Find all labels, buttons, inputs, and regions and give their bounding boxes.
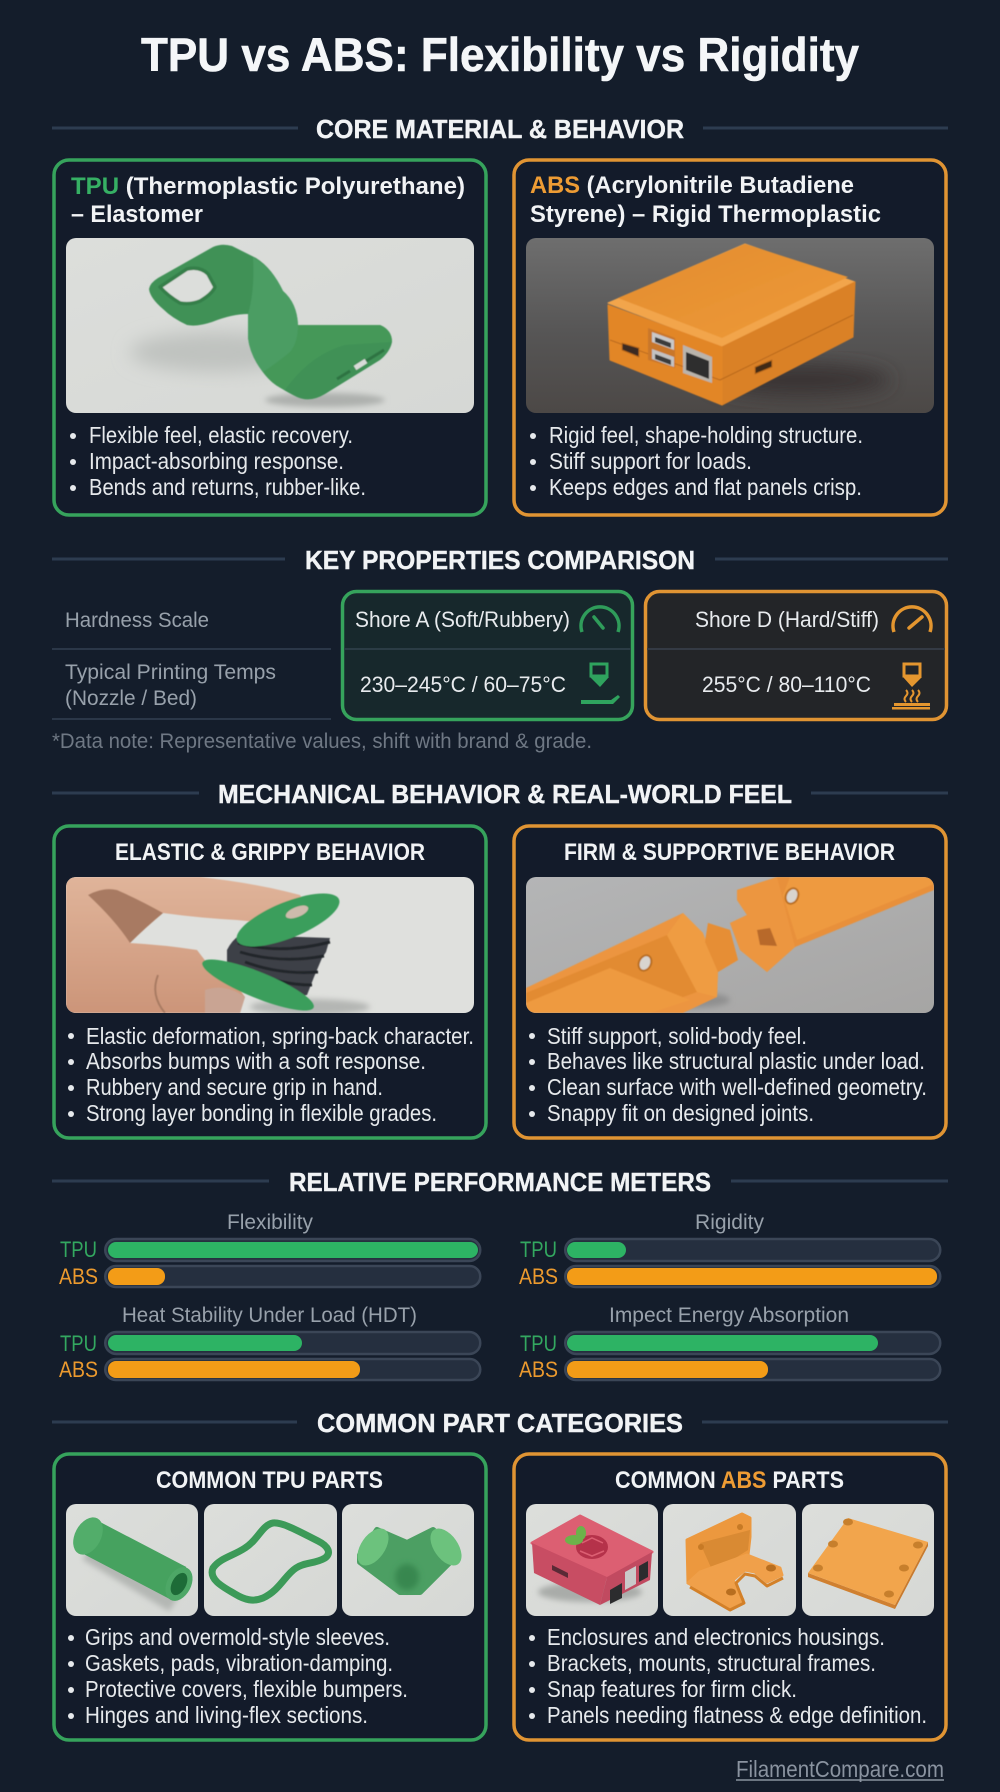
meter: heat stability under load: ABS — [59, 1357, 98, 1382]
row labels: Hardness Scale — [65, 609, 209, 632]
TPU heading — [71, 173, 465, 228]
TPU heading: TPU (Thermoplastic Polyurethane) — [71, 173, 465, 200]
meter: rigidity: ABS — [519, 1264, 558, 1289]
image: orange flat panel — [802, 1504, 934, 1616]
row labels: (Nozzle / Bed) — [65, 687, 197, 710]
image: green grip sleeve — [66, 1504, 198, 1616]
TPU behavior bullet list — [68, 1023, 474, 1126]
TPU values column — [342, 592, 632, 720]
TPU parts bullet list: Grips and overmold-style sleeves. — [85, 1624, 390, 1650]
data note: *Data note: Representative values, shift with brand & grade. — [52, 730, 592, 753]
ABS behavior bullet list: Snappy fit on designed joints. — [547, 1100, 814, 1126]
ABS heading: ABS (Acrylonitrile Butadiene — [530, 172, 854, 199]
ABS heading: Styrene) – Rigid Thermoplastic — [530, 201, 881, 228]
image: green wavy gasket — [204, 1504, 337, 1616]
TPU bullet list: Impact-absorbing response. — [89, 448, 344, 474]
ABS parts heading: COMMON ABS PARTS — [615, 1467, 844, 1494]
TPU parts bullet list: Hinges and living-flex sections. — [85, 1702, 368, 1728]
panel: ABS behavior — [514, 826, 946, 1138]
panel: common ABS parts — [514, 1454, 946, 1740]
row labels — [52, 609, 331, 719]
icon: nozzle over heated bed — [892, 664, 930, 710]
panel: TPU behavior — [54, 826, 486, 1138]
section heading: relative performance meters: RELATIVE PERFORMANCE METERS — [289, 1167, 711, 1197]
ABS behavior bullet list: Behaves like structural plastic under load. — [547, 1048, 925, 1074]
TPU values column: 230–245°C / 60–75°C — [360, 672, 566, 697]
meter: rigidity: Rigidity — [695, 1211, 764, 1234]
image: fingers squeezing green bellows — [66, 877, 474, 1020]
meter: heat stability under load — [59, 1304, 480, 1382]
image: twisted green TPU phone case — [66, 238, 474, 413]
panel: common TPU parts — [54, 1454, 486, 1740]
TPU bullet list: Bends and returns, rubber-like. — [89, 474, 366, 500]
meter: impact energy absorption: ABS — [519, 1357, 558, 1382]
ABS parts bullet list: Panels needing flatness & edge definition. — [547, 1702, 927, 1728]
meter: impact energy absorption — [519, 1304, 940, 1382]
ABS behavior bullet list: Stiff support, solid-body feel. — [547, 1023, 807, 1049]
icon: soft gauge — [581, 607, 619, 632]
icon: nozzle over bed — [581, 664, 620, 704]
ABS parts bullet list: Enclosures and electronics housings. — [547, 1624, 885, 1650]
image: green elbow cover — [342, 1504, 474, 1616]
TPU behavior bullet list: Strong layer bonding in flexible grades. — [86, 1100, 437, 1126]
panel: TPU material — [54, 160, 486, 515]
TPU behavior heading: ELASTIC & GRIPPY BEHAVIOR — [115, 839, 425, 866]
comparison table — [52, 592, 946, 720]
TPU bullet list — [70, 422, 366, 500]
ABS bullet list: Keeps edges and flat panels crisp. — [549, 474, 862, 500]
meter: impact energy absorption: Impect Energy Absorption — [609, 1304, 849, 1327]
ABS bullet list: Rigid feel, shape-holding structure. — [549, 422, 863, 448]
meter: flexibility: Flexibility — [227, 1211, 313, 1234]
ABS parts bullet list: Snap features for firm click. — [547, 1676, 797, 1702]
TPU parts bullet list: Protective covers, flexible bumpers. — [85, 1676, 408, 1702]
ABS parts bullet list: Brackets, mounts, structural frames. — [547, 1650, 876, 1676]
ABS heading — [530, 172, 881, 228]
image: orange ABS enclosure — [526, 238, 934, 413]
section heading: mechanical behavior: MECHANICAL BEHAVIOR & REAL-WORLD FEEL — [218, 779, 792, 809]
ABS behavior bullet list: Clean surface with well-defined geometry. — [547, 1074, 927, 1100]
meter: impact energy absorption: TPU — [520, 1331, 557, 1356]
meter: flexibility — [59, 1211, 480, 1289]
image: pink electronics enclosure — [526, 1504, 658, 1616]
TPU behavior bullet list: Elastic deformation, spring-back character. — [86, 1023, 474, 1049]
row labels: Typical Printing Temps — [65, 661, 276, 684]
TPU bullet list: Flexible feel, elastic recovery. — [89, 422, 353, 448]
title: TPU vs ABS: Flexibility vs Rigidity — [141, 28, 859, 81]
meter: heat stability under load: Heat Stability Under Load (HDT) — [122, 1304, 417, 1327]
ABS behavior bullet list — [529, 1023, 927, 1126]
section heading: core material and behavior: CORE MATERIAL & BEHAVIOR — [316, 114, 684, 144]
meter: rigidity: TPU — [520, 1237, 557, 1262]
TPU behavior bullet list: Absorbs bumps with a soft response. — [86, 1048, 426, 1074]
panel: ABS material — [514, 160, 946, 515]
ABS values column — [646, 592, 946, 720]
section heading: common part categories: COMMON PART CATEGORIES — [317, 1408, 683, 1438]
TPU parts bullet list — [68, 1624, 408, 1728]
icon: hard gauge — [893, 607, 931, 632]
TPU heading: – Elastomer — [71, 201, 203, 228]
ABS bullet list: Stiff support for loads. — [549, 448, 752, 474]
image: orange mounting bracket — [663, 1504, 796, 1616]
meter: heat stability under load: TPU — [60, 1331, 97, 1356]
image: orange snap-fit brackets — [526, 877, 934, 1013]
ABS behavior heading: FIRM & SUPPORTIVE BEHAVIOR — [564, 839, 895, 866]
ABS parts bullet list — [529, 1624, 927, 1728]
TPU parts bullet list: Gaskets, pads, vibration-damping. — [85, 1650, 393, 1676]
meter: flexibility: ABS — [59, 1264, 98, 1289]
TPU values column: Shore A (Soft/Rubbery) — [355, 607, 570, 632]
meter: flexibility: TPU — [60, 1237, 97, 1262]
ABS bullet list — [530, 422, 863, 500]
meter: rigidity — [519, 1211, 940, 1289]
ABS values column: Shore D (Hard/Stiff) — [695, 607, 879, 632]
section heading: key properties comparison: KEY PROPERTIES COMPARISON — [305, 545, 695, 575]
TPU behavior bullet list: Rubbery and secure grip in hand. — [86, 1074, 383, 1100]
ABS values column: 255°C / 80–110°C — [702, 672, 871, 697]
TPU parts heading: COMMON TPU PARTS — [156, 1467, 383, 1494]
footer credit: FilamentCompare.com — [736, 1756, 944, 1782]
